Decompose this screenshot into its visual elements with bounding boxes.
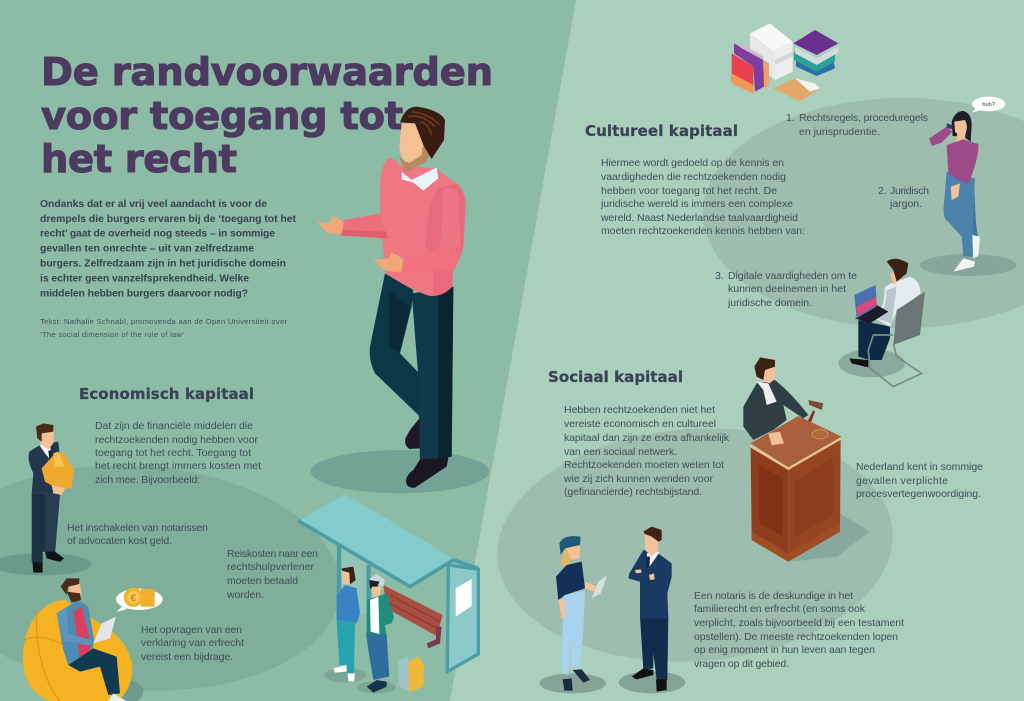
text: economisch kapitaal: toegang tot het recht. Toegang tot bbox=[95, 447, 251, 459]
text: procesvertegenwoordiging: gevallen verplichte bbox=[856, 475, 948, 487]
background blob: economisch bbox=[0, 452, 348, 701]
title: voor toegang tot bbox=[41, 94, 403, 139]
text: sociaal kapitaal: vereiste economisch en cultureel bbox=[564, 418, 716, 430]
list item 2: Juridisch bbox=[890, 185, 929, 197]
text: economisch kapitaal: Dat zijn de financiële middelen die bbox=[95, 420, 253, 432]
title bbox=[41, 50, 493, 182]
background: left page diagonal bbox=[0, 0, 576, 701]
title: De randvoorwaarden bbox=[41, 50, 493, 95]
text: cultureel kapitaal: Hiermee wordt gedoeld op de kennis en bbox=[601, 157, 784, 169]
text: sociaal kapitaal: kapitaal dan zijn ze extra afhankelijk bbox=[564, 432, 730, 444]
illustration: man on beanbag bbox=[23, 578, 143, 701]
list item 2: jargon. bbox=[889, 198, 922, 210]
text: cultureel kapitaal: wereld. Naast Nederlandse taalvaardigheid bbox=[600, 212, 798, 224]
intro text: drempels die burgers ervaren bij de ‘toegang tot het bbox=[40, 214, 297, 225]
author credit bbox=[40, 317, 287, 339]
intro text: gevallen ten onrechte – uit van zelfredzame bbox=[40, 244, 254, 254]
text: reiskosten: Reiskosten naar een bbox=[227, 548, 318, 560]
background blob: sociaal bbox=[489, 415, 901, 675]
text: reiskosten bbox=[226, 548, 318, 601]
text: cultureel kapitaal: hebben voor toegang tot het recht. De bbox=[601, 185, 777, 197]
illustration: books and documents bbox=[732, 23, 838, 102]
text: notaris: op enig moment in hun leven aan tegen bbox=[694, 644, 875, 656]
text: procesvertegenwoordiging bbox=[856, 461, 983, 500]
list item 3 bbox=[715, 270, 857, 309]
illustration: woman and notary bbox=[539, 527, 685, 693]
intro text: recht’ gaat de overheid nog steeds – in sommige bbox=[40, 228, 275, 240]
text: erfrecht: vereist een bijdrage. bbox=[141, 651, 233, 663]
heading: cultureel kapitaal: Cultureel kapitaal bbox=[585, 122, 738, 140]
text: sociaal kapitaal: wie zij zich kunnen wenden voor bbox=[563, 473, 714, 485]
text: notarissen: of advocaten kost geld. bbox=[67, 535, 172, 547]
list item 2: 2. bbox=[878, 185, 887, 197]
text: notaris: familierecht en erfrecht (en soms ook bbox=[694, 603, 866, 615]
text: reiskosten: moeten betaald bbox=[227, 575, 298, 587]
text: notarissen: Het inschakelen van notarissen bbox=[67, 522, 208, 534]
text: economisch kapitaal: rechtzoekenden nodig hebben voor bbox=[95, 434, 258, 446]
text: procesvertegenwoordiging: procesvertegenwoordiging. bbox=[856, 488, 981, 500]
text: erfrecht bbox=[141, 624, 244, 663]
illustration: man with laptop in chair bbox=[838, 259, 925, 387]
list item 2 bbox=[878, 185, 929, 210]
intro text: Ondanks dat er al vrij veel aandacht is voor de bbox=[40, 199, 267, 210]
icon: speech bubble with coins bbox=[116, 588, 163, 612]
title: het recht bbox=[41, 137, 237, 182]
list item 3: kunnen deelnemen in het bbox=[728, 283, 846, 295]
intro text: is echter geen vanzelfsprekendheid. Welke bbox=[40, 274, 249, 284]
text: sociaal kapitaal: Rechtzoekenden moeten weten tot bbox=[564, 459, 724, 471]
illustration: main man in pink sweater bbox=[311, 107, 489, 493]
text: erfrecht: Het opvragen van een bbox=[141, 624, 242, 636]
text: cultureel kapitaal bbox=[600, 157, 805, 237]
author credit: ‘The social dimension of the rule of law’ bbox=[40, 330, 184, 339]
text: notaris: opstellen). De meeste rechtzoekenden lopen bbox=[694, 631, 898, 643]
text: sociaal kapitaal bbox=[563, 404, 730, 498]
illustration: judge at lectern bbox=[743, 357, 870, 562]
illustration: woman on phone bbox=[920, 111, 1017, 276]
list item 1: en jurisprudentie. bbox=[799, 126, 880, 138]
background blob: cultureel bbox=[703, 98, 1024, 328]
author credit: Tekst: Nathalie Schnabl, promovenda aan de Open Universiteit over bbox=[40, 317, 287, 326]
icon: speech bubble huh: huh? bbox=[982, 102, 995, 108]
heading: economisch kapitaal: Economisch kapitaal bbox=[79, 385, 254, 403]
text: reiskosten: rechtshulpverlener bbox=[227, 561, 314, 573]
intro text: middelen hebben burgers daarvoor nodig? bbox=[40, 288, 248, 300]
text: cultureel kapitaal: juridische wereld is immers een complexe bbox=[600, 198, 793, 210]
heading: sociaal kapitaal: Sociaal kapitaal bbox=[548, 368, 683, 386]
text: reiskosten: worden. bbox=[226, 589, 264, 601]
list item 3: 3. bbox=[715, 270, 724, 282]
text: notaris: Een notaris is de deskundige in het bbox=[694, 590, 853, 602]
icon: speech bubble huh bbox=[972, 97, 1005, 113]
text: economisch kapitaal: zich mee. Bijvoorbeeld: bbox=[95, 474, 200, 486]
intro text bbox=[40, 199, 297, 300]
text: sociaal kapitaal: Hebben rechtzoekenden niet het bbox=[564, 404, 715, 416]
text: notaris: vragen op dit gebied. bbox=[694, 658, 789, 670]
icon: speech bubble with coins: € bbox=[130, 592, 136, 604]
list item 3: juridische domein. bbox=[727, 297, 812, 309]
illustration: bus shelter with people bbox=[298, 494, 478, 693]
list item 3: Digitale vaardigheden om te bbox=[728, 270, 857, 282]
text: economisch kapitaal: het recht brengt immers kosten met bbox=[95, 460, 261, 472]
list item 1 bbox=[786, 112, 928, 138]
text: notaris bbox=[694, 590, 904, 670]
text: economisch kapitaal bbox=[95, 420, 261, 486]
list item 1: 1. bbox=[786, 112, 795, 124]
text: cultureel kapitaal: moeten rechtzoekenden kennis hebben van: bbox=[601, 225, 805, 237]
intro text: burgers. Zelfredzaam zijn in het juridische domein bbox=[40, 258, 286, 270]
text: erfrecht: verklaring van erfrecht bbox=[141, 637, 244, 649]
list item 1: Rechtsregels, proceduregels bbox=[799, 112, 928, 124]
text: procesvertegenwoordiging: Nederland kent in sommige bbox=[856, 461, 983, 473]
text: cultureel kapitaal: vaardigheden die rechtzoekenden nodig bbox=[601, 171, 786, 183]
text: notarissen bbox=[67, 522, 208, 547]
text: sociaal kapitaal: (gefinancierde) rechtsbijstand. bbox=[564, 486, 702, 498]
illustration: man with piggy bank bbox=[0, 423, 92, 575]
text: sociaal kapitaal: van een sociaal netwerk. bbox=[564, 446, 677, 458]
text: notaris: verplicht, zoals bijvoorbeeld bij een testament bbox=[694, 617, 904, 629]
